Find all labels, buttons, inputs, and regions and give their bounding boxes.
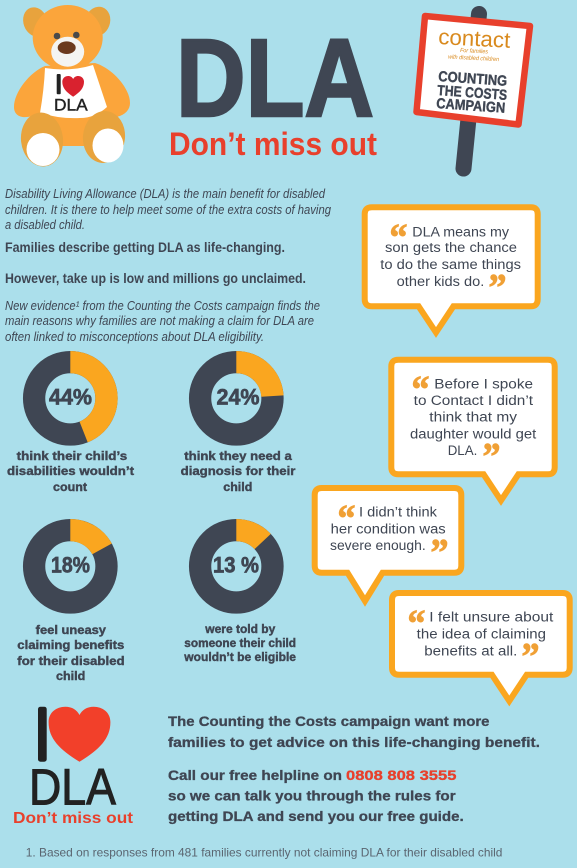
icon: teddy bear with I love DLA shirt: DLA (54, 96, 88, 115)
callout: I didn't think: her condition was (331, 521, 446, 536)
callout: Before I spoke to Contact (391, 360, 555, 500)
label: 44%: disabilities wouldn’t (7, 466, 134, 478)
text block: introduction: Disability Living Allowance (DLA) is the main benefit for disabled (5, 187, 326, 201)
callout: DLA means my son: DLA means my (412, 225, 509, 240)
text block: new evidence: often linked to misconceptions about DLA eligibility. (5, 330, 264, 344)
text block: helpline (168, 767, 464, 824)
icon: campaign sign: CAMPAIGN (436, 96, 506, 117)
label: 13%: wouldn’t be eligible (183, 652, 296, 664)
label: 44% (7, 451, 134, 494)
donut chart: 13% (200, 530, 272, 602)
callout: I felt unsure: “ (408, 603, 426, 645)
text block: campaign message: families to get advice on this life-changing benefit. (168, 734, 540, 750)
text block: campaign message (168, 713, 540, 750)
text block: low take up statement: However, take up is low and millions go unclaimed. (5, 270, 306, 286)
callout: I didn't think: ” (430, 532, 448, 574)
icon: campaign sign: COUNTING (438, 69, 508, 90)
icon: campaign sign: For families (460, 48, 488, 55)
label: 24% (181, 451, 296, 494)
callout: Before I spoke to Contact: DLA. (448, 443, 477, 458)
callout: I felt unsure: ” (522, 636, 540, 678)
label: 44%: think their child’s (17, 451, 127, 463)
label: 13%: were told by (204, 624, 276, 636)
title: DLA (176, 17, 374, 140)
callout: I didn't think: “ (338, 498, 356, 540)
icon: teddy bear with I love DLA shirt (14, 3, 130, 169)
callout: DLA means my son: to do the same things (380, 257, 521, 272)
text block: introduction: children. It is there to help meet some of the extra costs of having (5, 203, 331, 217)
text block: introduction (5, 187, 331, 232)
icon: campaign sign (416, 14, 530, 168)
callout: I felt unsure: the idea of claiming (417, 627, 546, 642)
label: 24%: diagnosis for their (181, 466, 296, 478)
label: 24%: think they need a (184, 451, 292, 463)
callout: I felt unsure: benefits at all. (424, 643, 517, 658)
label: 18%: claiming benefits (17, 640, 124, 652)
label: 13% (183, 624, 296, 664)
text block: helpline: so we can talk you through the rules for (168, 788, 456, 804)
label: 18%: for their disabled (17, 656, 125, 668)
logo: I love DLA: Don’t miss out (13, 810, 134, 827)
donut chart: 24%: 24% (216, 384, 260, 410)
callout: I didn't think: I didn’t think (359, 505, 437, 520)
label: 18%: child (56, 671, 85, 683)
icon: campaign sign: contact (438, 24, 511, 53)
text block: helpline: Call our free helpline on (168, 767, 342, 783)
callout: I felt unsure (392, 593, 570, 701)
icon: campaign sign: with disabled children (448, 55, 500, 63)
subtitle: Don’t miss out (169, 126, 377, 162)
donut chart: 44% (34, 362, 106, 434)
label: 13%: someone their child (184, 638, 296, 650)
text block: new evidence: main reasons why families are not making a claim for DLA are (5, 314, 314, 328)
text block: new evidence (5, 299, 320, 344)
label: 44%: count (53, 482, 87, 494)
text block: introduction: a disabled child. (5, 218, 85, 232)
callout: Before I spoke to Contact: think that my (429, 410, 517, 425)
callout: DLA means my son: son gets the chance (385, 240, 517, 255)
text block: helpline: 0808 808 3555 (346, 767, 457, 783)
callout: I didn't think: severe enough. (330, 538, 426, 553)
donut chart: 44%: 44% (49, 384, 92, 410)
icon: campaign sign: THE COSTS (437, 83, 508, 104)
label: 18% (17, 625, 125, 683)
callout: Before I spoke to Contact: ” (482, 436, 500, 478)
donut chart: 18%: 18% (51, 552, 90, 578)
donut chart: 18% (34, 530, 107, 602)
callout: I didn't think (315, 488, 461, 601)
callout: Before I spoke to Contact: daughter would get (410, 426, 537, 441)
logo: I love DLA (13, 707, 134, 827)
donut chart: 24% (200, 362, 272, 434)
text block: helpline: getting DLA and send you our free guide. (168, 808, 464, 824)
text block: life-changing statement: Families describe getting DLA as life-changing. (5, 239, 285, 255)
callout: Before I spoke to Contact: “ (412, 369, 430, 411)
callout: Before I spoke to Contact: Before I spoke (434, 376, 533, 391)
footnote: 1. Based on responses from 481 families currently not claiming DLA for their disabled child (26, 846, 502, 860)
callout: DLA means my son: “ (390, 217, 408, 259)
callout: I felt unsure: I felt unsure about (429, 610, 554, 625)
label: 18%: feel uneasy (36, 625, 107, 637)
donut chart: 13%: 13 % (213, 552, 259, 578)
text block: new evidence: New evidence¹ from the Counting the Costs campaign finds the (5, 299, 320, 313)
label: 24%: child (223, 482, 252, 494)
callout: DLA means my son (365, 207, 538, 332)
text block: campaign message: The Counting the Costs campaign want more (168, 713, 490, 729)
callout: DLA means my son: other kids do. (397, 274, 484, 289)
logo: I love DLA: DLA (29, 758, 116, 815)
callout: Before I spoke to Contact: to Contact I didn’t (414, 393, 533, 408)
callout: DLA means my son: ” (488, 267, 506, 309)
